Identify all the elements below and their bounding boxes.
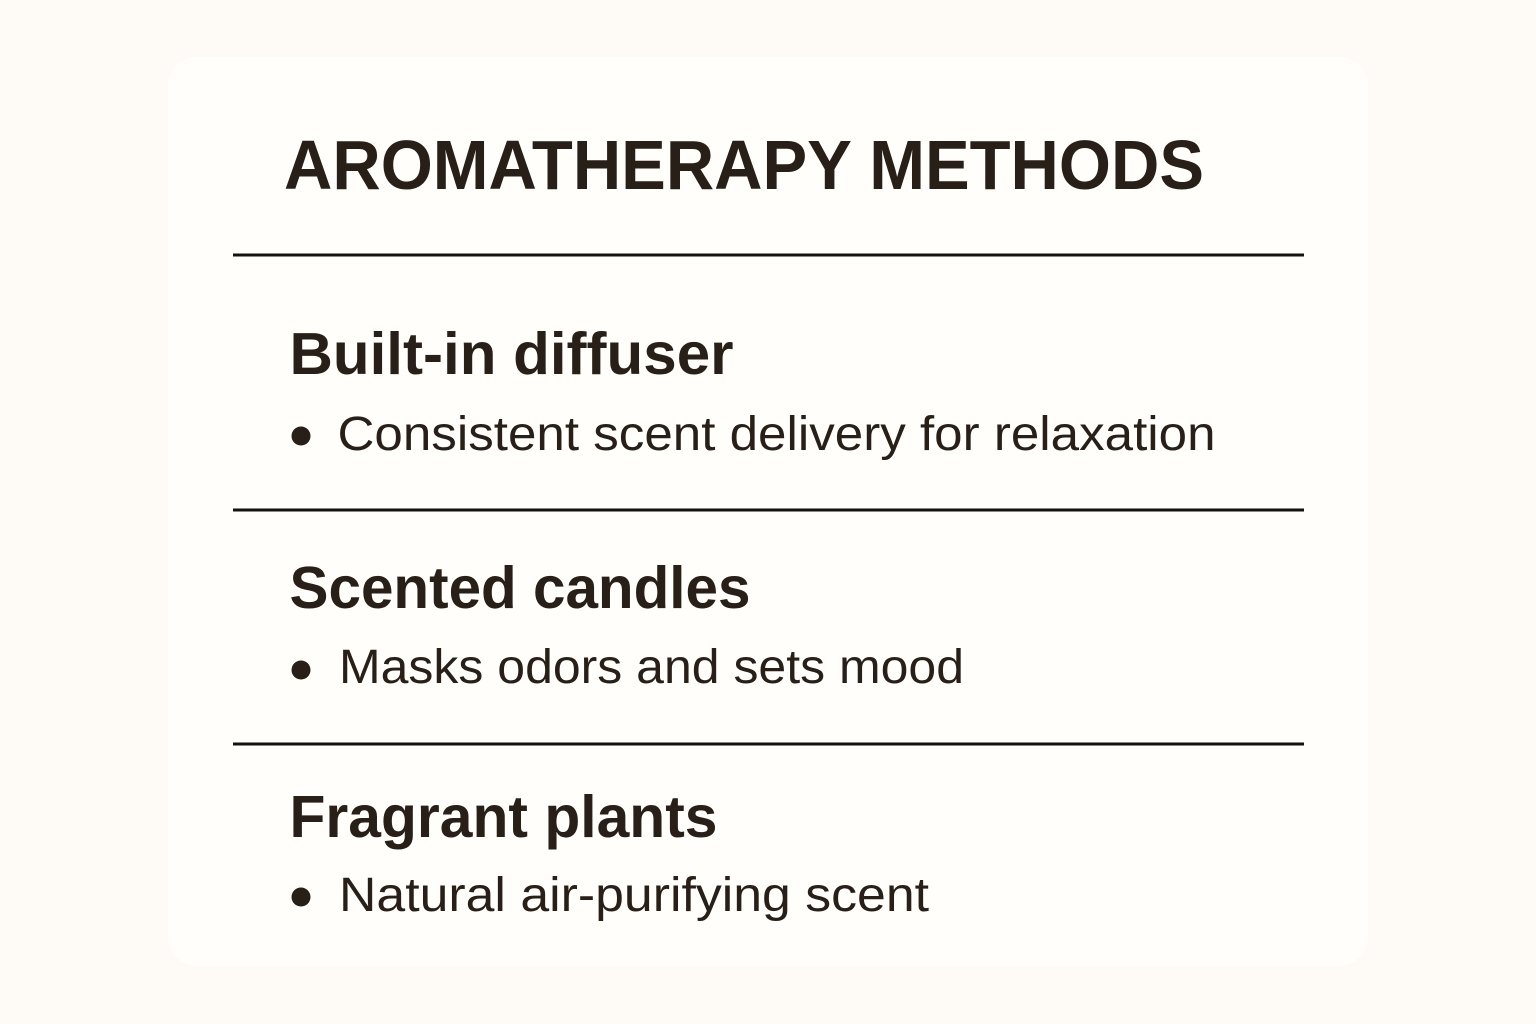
heading: built-in diffuser: Built-in diffuser — [290, 321, 734, 387]
section: fragrant plants — [290, 784, 929, 922]
bullet item: consistent scent delivery: Consistent scent delivery for relaxation — [338, 408, 1216, 461]
section: built-in diffuser — [290, 321, 1216, 461]
title: AROMATHERAPY METHODS — [284, 126, 1204, 204]
heading: scented candles: Scented candles — [290, 555, 750, 621]
heading: fragrant plants: Fragrant plants — [290, 784, 718, 850]
bullet item: masks odors: Masks odors and sets mood — [339, 641, 964, 694]
section: scented candles — [290, 555, 964, 694]
bullet item: natural air-purifying scent: Natural air-purifying scent — [339, 869, 929, 922]
panel: card — [168, 57, 1368, 966]
